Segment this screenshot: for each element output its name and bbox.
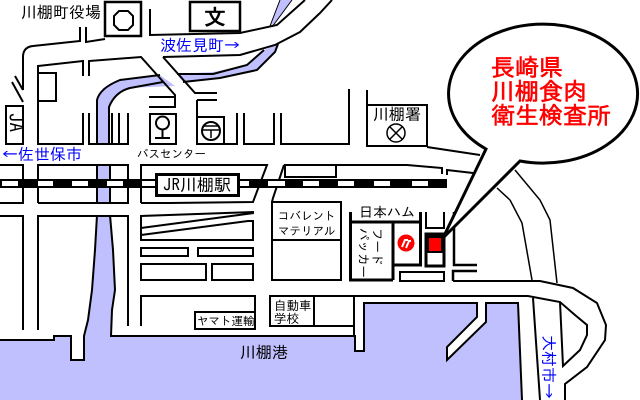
label: to Omura city: 大村市→ [541,335,557,399]
label: bus center: バスセンター [137,148,206,160]
label: driving school: 自動車 [274,299,312,312]
label: driving school [274,299,312,325]
callout text: 長崎県 [491,55,563,79]
Food Packer building: フード [371,228,384,266]
Cobalt Material building: コバレント [278,210,336,222]
callout [443,24,638,238]
label: to Hasami town: 波佐見町→ [160,37,240,53]
label: Yamato Transport [195,312,255,329]
Cobalt Material building: マテリアル [278,226,336,237]
station: JR Kawatana: JR川棚駅 [163,176,231,194]
label: JA [6,106,25,144]
callout text: 川棚食肉 [491,79,587,103]
label: town office: 川棚町役場 [21,4,101,20]
callout text: 衛生検査所 [491,103,611,127]
Cobalt Material building [272,202,341,280]
Food Packer building [350,212,420,280]
label: to Sasebo city: ←佐世保市 [2,146,82,162]
label: Nippon Ham: 日本ハム [359,205,415,219]
label: driving school: 学校 [274,312,300,325]
icon: school: 文 [204,6,226,28]
railway track [0,179,447,188]
label: Yamato Transport: ヤマト運輸 [197,315,254,327]
marker: inspection station [426,234,444,266]
police station [373,106,421,142]
callout text [491,55,611,127]
icon: town office [105,2,141,36]
station: JR Kawatana [156,174,238,196]
icon: Nippon Ham logo [398,234,414,252]
label: JA: JA [6,113,25,132]
icon: bus center pin [150,114,176,144]
label: Kawatana port: 川棚港 [240,344,288,360]
police station: 川棚署 [373,106,421,122]
icon: school [190,2,240,31]
icon: post office [197,117,224,144]
Food Packer building: パッカー [357,228,370,278]
